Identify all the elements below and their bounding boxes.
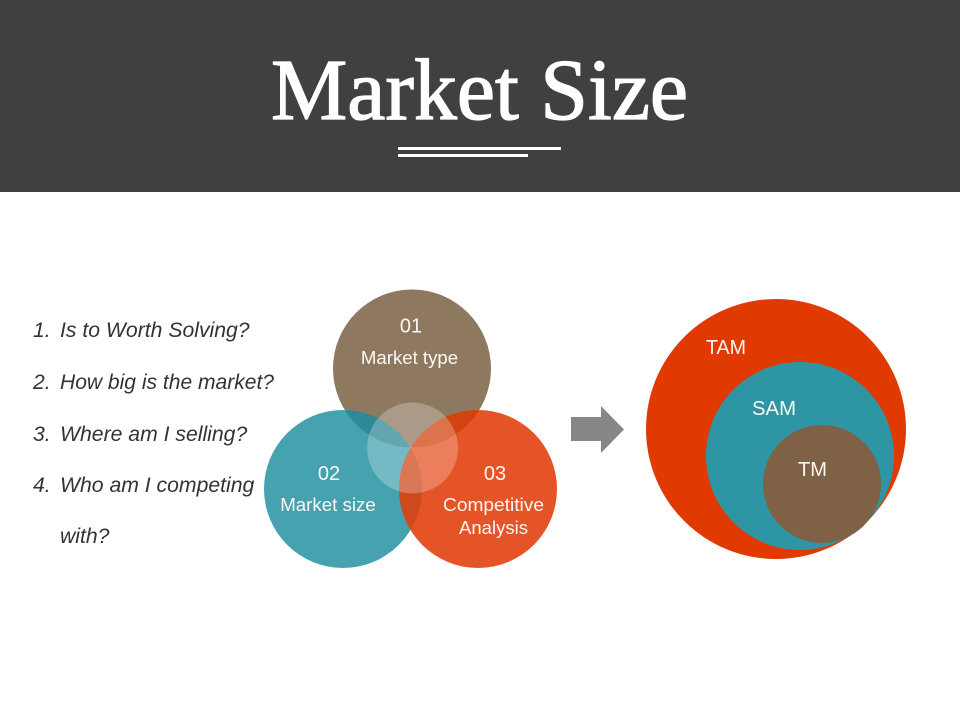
circle: market type	[333, 290, 491, 448]
numbered question list: How big is the market?	[60, 371, 274, 394]
numbered question list	[32, 319, 274, 548]
label: TM: TM	[798, 459, 827, 481]
numbered question list: Where am I selling?	[60, 423, 247, 446]
arrow	[571, 406, 624, 453]
label: 03 competitive analysis	[443, 463, 544, 538]
label: TAM: TAM	[706, 337, 746, 359]
numbered question list: 2.	[32, 371, 51, 394]
numbered question list: Is to Worth Solving?	[60, 319, 250, 342]
circle: SAM	[706, 362, 894, 550]
numbered question list: with?	[60, 525, 110, 548]
numbered question list: 1.	[33, 319, 51, 342]
circle: TM	[763, 425, 881, 543]
title: Market Size	[271, 41, 688, 138]
label: 02 market size: Market size	[280, 494, 376, 515]
numbered question list: 3.	[33, 423, 51, 446]
label: 02 market size	[280, 463, 376, 515]
label: 02 market size: 02	[318, 463, 340, 485]
title underline	[398, 147, 561, 157]
nested market circles	[646, 299, 906, 559]
venn diagram	[264, 290, 557, 568]
circle: TAM	[646, 299, 906, 559]
overlap: market type and market size	[345, 410, 410, 448]
label: 01 market type	[361, 316, 458, 368]
label: 01 market type: 01	[400, 316, 422, 338]
label: 03 competitive analysis: 03	[484, 463, 506, 485]
circle: competitive analysis	[399, 410, 557, 568]
overlap: market type and competitive analysis	[410, 410, 479, 448]
label: SAM: SAM	[752, 398, 796, 420]
label: 01 market type: Market type	[361, 347, 458, 368]
label: 03 competitive analysis: Competitive	[443, 494, 544, 515]
circle: market size	[264, 410, 422, 568]
label: 03 competitive analysis: Analysis	[459, 517, 528, 538]
header banner	[0, 0, 960, 192]
centre highlight circle	[367, 402, 458, 494]
numbered question list: 4.	[33, 474, 51, 497]
overlap: market size and competitive analysis	[399, 448, 422, 530]
numbered question list: Who am I competing	[60, 474, 255, 497]
